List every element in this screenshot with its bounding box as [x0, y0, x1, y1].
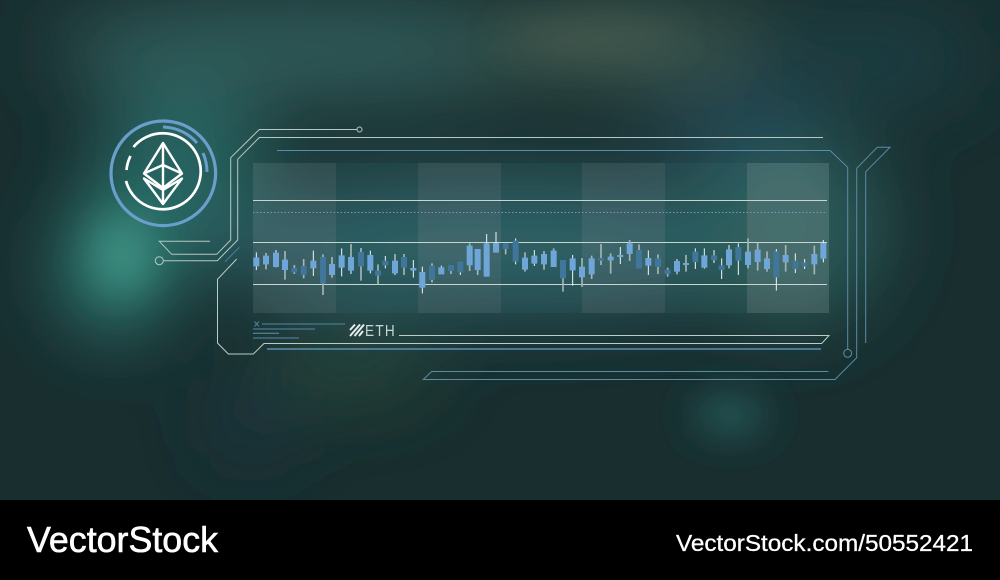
- circuit frame: upper left lines: [155, 127, 823, 265]
- circuit frame: top right blue line: [277, 150, 852, 357]
- ETH hatch icon: [350, 324, 364, 336]
- blue bottom rule: [267, 348, 821, 350]
- circuit frame: lower left and bottom line: [218, 259, 829, 354]
- icon: ethereum coin: [111, 121, 216, 226]
- chart grid lines: [253, 200, 827, 284]
- footer logo text: VectorStock: [27, 519, 219, 560]
- legend lines: [253, 322, 345, 338]
- candlestick chart: [256, 232, 823, 295]
- ETH label: ETH: [365, 323, 396, 340]
- circuit frame: short blue accent: [225, 247, 239, 262]
- footer url text: VectorStock.com/50552421: [676, 530, 973, 556]
- circuit frame: right bracket: [423, 147, 890, 380]
- chart background bands: [253, 163, 829, 313]
- black footer bar: [0, 500, 1000, 580]
